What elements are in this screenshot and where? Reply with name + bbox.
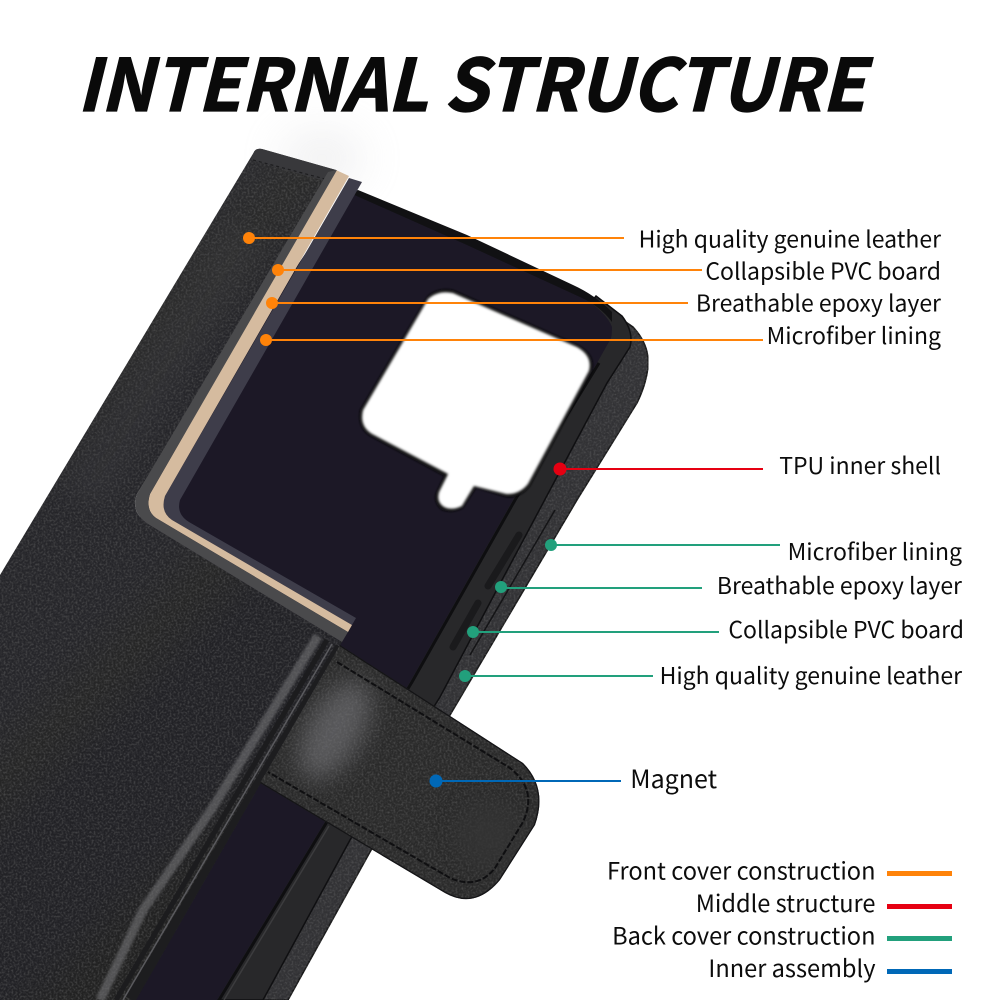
callout: collapsible PVC board, back: Collapsible PVC board <box>728 611 964 645</box>
legend: inner assembly <box>708 950 952 984</box>
wallet case illustration <box>0 149 648 1000</box>
layer: gray PVC board <box>135 170 348 642</box>
top stitched flap of front cover <box>251 149 336 182</box>
legend: front cover construction: Front cover construction <box>607 852 876 886</box>
layer: slate microfiber lining <box>164 178 362 625</box>
title: INTERNAL STRUCTURE <box>77 27 874 132</box>
callout: high quality genuine leather, back <box>459 657 962 691</box>
callout: breathable epoxy layer, back: Breathable epoxy layer <box>717 567 962 601</box>
callout: breathable epoxy layer, back <box>495 567 962 601</box>
callout: TPU inner shell: TPU inner shell <box>779 447 941 481</box>
callout: magnet <box>430 760 718 796</box>
callout: microfiber lining, front <box>260 317 941 351</box>
callout: collapsible PVC board, back <box>467 611 964 645</box>
camera cutout <box>359 289 593 512</box>
side buttons on the shell <box>453 535 519 647</box>
callout: high quality genuine leather, front: High quality genuine leather <box>639 220 941 254</box>
callout: collapsible PVC board, front <box>272 252 941 286</box>
callout: microfiber lining, back <box>545 533 962 567</box>
callout: magnet: Magnet <box>630 760 718 796</box>
back cover leather edge <box>240 318 648 1000</box>
callout: TPU inner shell <box>554 447 941 481</box>
callout: breathable epoxy layer, front: Breathable epoxy layer <box>696 284 941 318</box>
soft shadow above the case <box>282 136 362 180</box>
legend: inner assembly: Inner assembly <box>708 950 876 984</box>
layer: tan epoxy <box>148 170 352 632</box>
callout: collapsible PVC board, front: Collapsible PVC board <box>705 252 941 286</box>
leather crease highlights <box>80 230 342 1000</box>
magnetic strap <box>260 645 539 899</box>
thin highlight line on shell below strap <box>224 826 329 1000</box>
callout: microfiber lining, back: Microfiber lining <box>788 533 962 567</box>
top black rim of shell <box>350 190 612 322</box>
black inner edge of shell <box>219 363 599 1000</box>
legend: middle structure: Middle structure <box>696 885 876 919</box>
callout: high quality genuine leather, front <box>243 220 941 254</box>
legend: back cover construction: Back cover construction <box>612 918 876 952</box>
callout: high quality genuine leather, back: High quality genuine leather <box>660 657 962 691</box>
callout: breathable epoxy layer, front <box>266 284 941 318</box>
callout: microfiber lining, front: Microfiber lining <box>767 317 941 351</box>
black seam between shell and leather <box>470 510 555 655</box>
phone interior <box>130 190 612 1000</box>
legend <box>607 852 952 984</box>
TPU inner shell <box>210 296 631 1000</box>
front cover leather <box>0 149 342 1000</box>
